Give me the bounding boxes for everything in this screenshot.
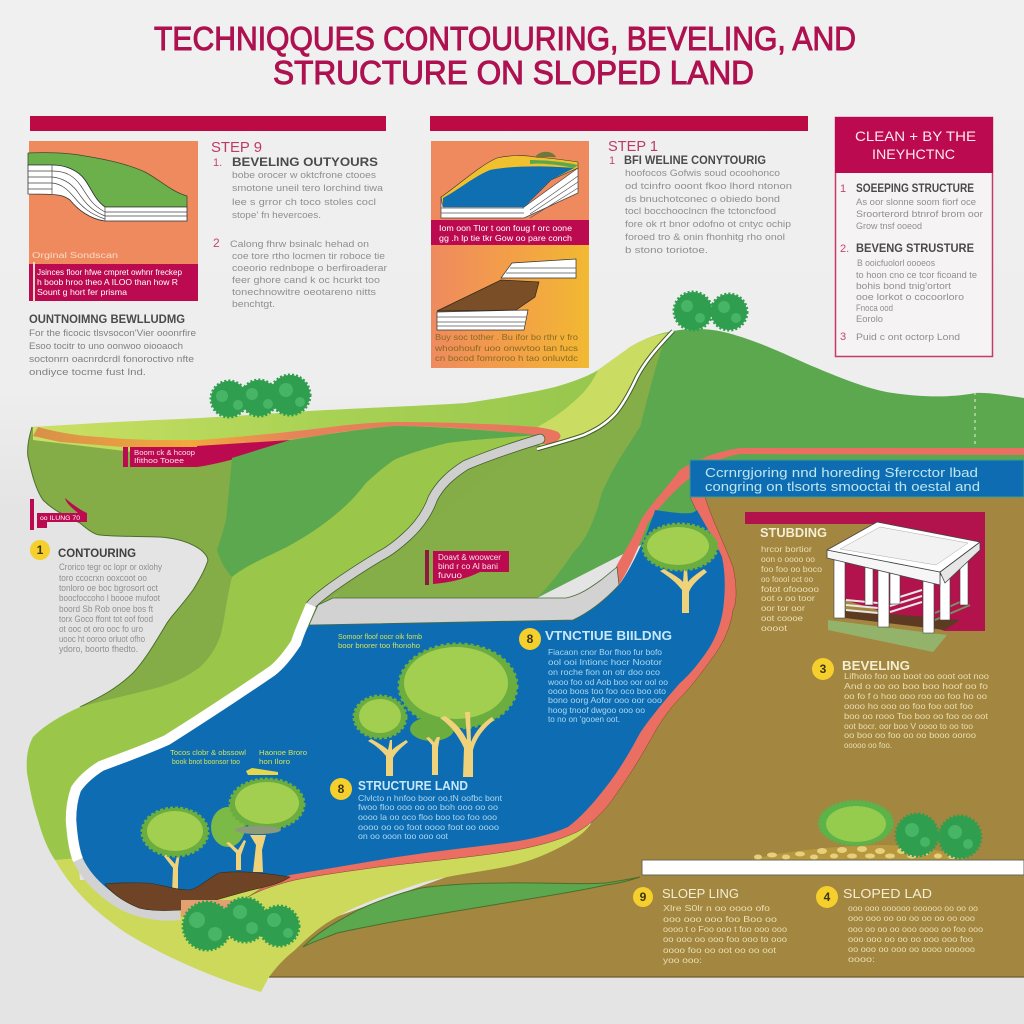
badge 3	[330, 778, 352, 800]
list item 3	[840, 331, 960, 343]
item 2: 2	[213, 236, 220, 250]
blue banner: Ccrnrgjoring nnd horeding Sfercctor lbad	[705, 465, 978, 480]
beveling text block	[812, 658, 989, 750]
list item 2: to hoon cno ce tcor ficoand te	[856, 270, 977, 280]
illustration card	[431, 141, 589, 368]
list item 1: 1	[840, 183, 846, 195]
small annotations: book bnot boonsor too	[172, 757, 240, 766]
panel header	[835, 117, 993, 173]
item 2: tonechnowitre oeotareno nitts	[232, 287, 377, 297]
structure land text block: oooo la oo oco floo boo too foo ooo	[358, 812, 497, 822]
item 1: bobe orocer w oktcfrone ctooes	[232, 170, 377, 180]
crimson tag: mid slope: fuvuo	[438, 571, 463, 580]
stubding text block: oooot	[761, 623, 788, 633]
contouring text block: boord Sb Rob onoe bos ft	[59, 604, 153, 614]
front columns	[834, 560, 934, 633]
sloping text block: Xlre S0lr n oo oooo ofo	[663, 903, 770, 913]
panel: step 9	[28, 116, 387, 377]
left field base	[28, 415, 540, 800]
list item 2: Fnoca ood	[856, 303, 893, 313]
panel header: INEYHCTNC	[872, 146, 955, 162]
list item 2	[840, 243, 977, 324]
step 1 text	[609, 155, 792, 255]
road crest line	[537, 331, 673, 449]
panel header: CLEAN + BY THE	[855, 128, 976, 144]
list item 1: Grow tnsf ooeod	[856, 221, 922, 231]
item 1: stope' fn hevercoes.	[232, 210, 321, 220]
olive ground	[269, 497, 1024, 977]
structure land text block	[330, 778, 503, 841]
lake note	[338, 632, 422, 650]
small annotations	[170, 748, 307, 766]
item 2: Calong fhrw bsinalc hehad on	[230, 239, 369, 249]
illustration card: cn bocod fomroroo h tao onluvtdc	[435, 353, 579, 363]
list item 1: SOEEPING STRUCTURE	[856, 183, 974, 195]
beveling text block: oo fo f o hoo ooo roo oo foo ho oo	[844, 691, 987, 701]
icon: bush lower left	[183, 898, 299, 950]
structure illustration	[745, 512, 985, 652]
crimson caption	[29, 262, 198, 302]
step 1 text: fore ok rt bnor odofno ot cntyc ochip	[625, 219, 791, 229]
salmon soil patch	[181, 900, 235, 917]
dashed marker on hill	[974, 392, 976, 445]
blue banner	[690, 460, 1024, 497]
crimson tag: top contour label: Ifithoo Tooee	[134, 456, 184, 465]
illustration card: Buy soc tother . Bu ifor bo rthr v fro	[435, 332, 578, 342]
crimson backdrop	[745, 512, 985, 631]
trees: lower left	[105, 748, 307, 911]
small annotations: Haonoe Broro	[259, 748, 307, 757]
landscape: sloped hill	[27, 329, 1024, 992]
item 1: lee s grror ch toco stoles cocl	[232, 197, 376, 207]
structure building text block: on roche fion on otr doo oco	[548, 667, 660, 677]
yellow lime band near crest	[537, 333, 670, 447]
front tree	[142, 808, 208, 893]
upper lime band	[33, 331, 673, 460]
beveling text block: oot bocr. oor boo V oooo to oo too	[844, 721, 973, 731]
contouring text block: CONTOURING	[58, 546, 136, 560]
contour stripe	[33, 422, 560, 447]
title	[154, 20, 856, 91]
item 2: feer ghore cand k oc hcurkt too	[232, 275, 380, 285]
outlining beveling text block	[29, 314, 196, 377]
sloped land text block: SLOPED LAD	[843, 886, 932, 901]
badge 2: 8	[527, 632, 534, 646]
crimson tag: mid slope: bind r co Al bani	[438, 562, 498, 571]
back tree	[211, 807, 246, 870]
left field outline	[28, 427, 208, 707]
step label: STEP 9	[211, 139, 262, 156]
list item 1: As oor slonne soom fiorf oce	[856, 197, 976, 207]
step 1 text: hoofocos Gofwis soud ocoohonco	[625, 168, 780, 178]
contouring text block: ot ooc ot oro ooc fo uro	[59, 624, 143, 634]
ground hedge	[828, 620, 947, 652]
structure land text block: fwoo floo ooo oo oo boh ooo oo oo	[358, 802, 498, 812]
stubding text block: foo foo oo boco	[761, 564, 822, 574]
structure building text block: Fiacaon cnor Bor fhoo fur bofo	[548, 647, 662, 657]
badge	[812, 658, 834, 680]
crimson caption: h boob hroo theo A ILOO than how R	[37, 277, 178, 287]
icon: bush on upper slope	[211, 375, 310, 417]
soil mound	[105, 872, 290, 911]
stubding text block	[760, 525, 827, 633]
outlining beveling text block: ondiyce tocme fust lnd.	[29, 367, 146, 377]
badge: 3	[820, 662, 827, 676]
beveling text block: oo boo oo foo oo oo booo ooroo	[844, 730, 976, 740]
sloping text block	[633, 886, 787, 965]
slats	[846, 590, 970, 620]
item 2: coeorio rednbope o berfiroaderar	[232, 263, 387, 273]
panel: clean by the inerhcting	[835, 117, 993, 356]
sloping text block: SLOEP LING	[662, 886, 739, 901]
stubding text block: STUBDING	[760, 525, 827, 540]
step 1 text: od tcinfro ooont fkoo lhord ntonon	[625, 181, 792, 191]
header bar middle	[430, 116, 808, 131]
stubding text block: oot o oo toor	[761, 593, 815, 603]
contouring text block: toro ccocrxn ooxcoot oo	[59, 573, 147, 583]
contouring text block: Crorico tegr oc lopr or oxlohy	[59, 562, 162, 572]
trees: center lake	[354, 644, 517, 777]
stubding text block: oo foool oct oo	[761, 574, 813, 584]
stones	[750, 845, 967, 860]
sloped land text block: ooo ooo oo oo oo oo oo oo ooo	[848, 913, 975, 923]
soil floor	[845, 610, 960, 630]
road grey section	[311, 439, 540, 605]
middle tree	[410, 717, 454, 775]
contouring text block: tonloro oe boc bgrosort oct	[59, 583, 158, 593]
stubding text block: oor tor oor	[761, 603, 805, 613]
structure building text block: bono oorg Aofor ooo oor ooo	[548, 695, 662, 705]
illustration card: whoohoufr uoo onwvtoo tan fucs	[434, 343, 578, 353]
sloping text block: oooo foo oo oot oo oo oot	[663, 945, 777, 955]
list item 2: bohis bond tnig'ortort	[856, 281, 952, 291]
beveling text block: And o oo oo boo boo hoof oo fo	[844, 681, 988, 691]
sloping text block: ooo ooo ooo foo Boo oo	[663, 914, 777, 924]
contouring text block: boocfoccoho l boooe mufoot	[59, 593, 160, 603]
list item 2: 2.	[840, 243, 849, 255]
sloped land text block: oooo:	[848, 954, 875, 964]
beveling text block: boo oo rooo Too boo oo foo oo oot	[844, 711, 989, 721]
structure building text block: to no on 'gooen oot.	[548, 714, 620, 724]
title: TECHNIQQUES CONTOUURING, BEVELING, AND	[154, 20, 856, 57]
lake note: boor bnorer too fhonoho	[338, 641, 420, 650]
stubding text block: fotot ofooooo	[761, 584, 819, 594]
item 1: 1.	[213, 157, 222, 169]
structure building text block: VTNCTIUE BIILDNG	[545, 628, 672, 643]
list item 3: Puid c ont octorp Lond	[856, 332, 960, 342]
back columns	[865, 560, 968, 620]
item 2: benchtgt.	[232, 299, 275, 309]
badge 3: 8	[338, 782, 345, 796]
tall tree	[230, 779, 304, 872]
sloped land text block	[816, 886, 983, 964]
step 1 text: foroed tro & onin fhonhitg rho onol	[625, 232, 785, 242]
stones and bushes	[750, 801, 981, 860]
sloping text block: oooo t o Foo ooo t foo ooo ooo	[663, 924, 787, 934]
item 2: coe tore rtho locmen tir roboce tie	[232, 251, 385, 261]
crimson strip: Iom oon Tlor t oon foug f orc oone	[439, 223, 572, 233]
crimson tag: mid slope	[425, 550, 509, 585]
structure land text block: on oo ooon too ooo oot	[358, 831, 449, 841]
crimson caption: Jsinces floor hfwe cmpret owhnr freckep	[37, 267, 182, 277]
contouring text block	[30, 540, 162, 654]
tree: near banner	[643, 524, 717, 613]
list item 2: BEVENG STRUSTURE	[856, 243, 974, 255]
white ledge	[642, 860, 1024, 875]
list item 2: ooe lorkot o cocoorloro	[856, 292, 964, 302]
header bar left	[30, 116, 386, 131]
small annotations: Tocos clobr & obssowl	[170, 748, 246, 757]
structure land text block: Clvlcto n hnfoo boor oo,tN oofbc bont	[358, 793, 503, 803]
list item 1: Sroorterord btnrof brom oor	[856, 209, 983, 219]
outlining beveling text block: soctonrn oacnrdcrdl fonoroctivo nfte	[29, 354, 194, 364]
structure building text block: hoog tnoof dwgoo ooo oo	[548, 705, 645, 715]
icon: bush on hill crest	[674, 292, 747, 330]
item 1: BEVELING OUTYOURS	[232, 157, 378, 169]
lime slope	[27, 436, 537, 860]
structure building text block	[519, 628, 672, 724]
outlining beveling text block: OUNTNOIMNG BEWLLUDMG	[29, 314, 185, 326]
outlining beveling text block: Esoo tocitr to uno oonwoo oiooaoch	[29, 341, 183, 351]
stubding text block: oot coooe	[761, 613, 803, 623]
title: STRUCTURE ON SLOPED LAND	[273, 54, 754, 91]
structure land text block: STRUCTURE LAND	[358, 778, 468, 793]
sloped land text block: ooo oo oo oo ooo oooo oo foo ooo	[848, 924, 983, 934]
badge	[816, 886, 838, 908]
crimson tag: left arrow: oo ILUNG 70	[40, 515, 80, 522]
large tree	[399, 644, 517, 777]
badge: 4	[824, 890, 831, 904]
crimson strip	[431, 220, 589, 245]
crimson caption: Sount g hort fer prisma	[37, 287, 127, 297]
structure land text block: oooo oo oo foot oooo foot oo oooo	[358, 822, 499, 832]
contouring text block: torx Goco ffont tot oof food	[59, 614, 153, 624]
crimson tag: top contour label	[123, 447, 197, 467]
step 1 text: 1	[609, 155, 615, 167]
crimson tag: top contour label: Boom ck & hcoop	[134, 448, 195, 457]
contouring text block: uooc ht ooroo orluot ofho	[59, 634, 145, 644]
lake	[75, 510, 725, 911]
roof	[827, 522, 980, 585]
outlining beveling text block: For the ficocic tlsvsocon'Vier ooonrfire	[29, 328, 196, 338]
light bush	[819, 801, 893, 845]
structure building text block: wooo foo od Aob boo oor ool oo	[547, 677, 668, 687]
badge 1: 1	[37, 543, 44, 557]
crimson tag: left arrow	[30, 498, 87, 530]
beveling text block: ooooo oo foo.	[844, 740, 892, 750]
list item 2: B ooicfuolorl oooeos	[857, 258, 935, 268]
item 1: smotone uneil tero lorchind tiwa	[232, 183, 383, 193]
lake note: Somoor floof oocr oik fomb	[338, 632, 422, 641]
panel: step 1	[430, 116, 808, 368]
salmon bank lower	[248, 497, 736, 897]
step 1 text: ds bnuchotconec o obiedo bond	[625, 194, 780, 204]
small yellow marker	[246, 768, 278, 775]
beveling text block: BEVELING	[842, 658, 910, 673]
crimson strip: gg .h lp tie tkr Gow oo pare conch	[439, 233, 572, 243]
stubding text block: hrcor bortior	[761, 544, 812, 554]
green swoosh	[303, 877, 640, 947]
step label: STEP 1	[608, 138, 658, 155]
structure building text block: oooo boos too foo oco boo oto	[548, 686, 666, 696]
sloped land text block: ooo ooo oooooo oooooo oo oo oo	[848, 903, 978, 913]
grey road branch	[309, 567, 619, 625]
badge 2	[519, 628, 541, 650]
road white section	[71, 605, 311, 860]
item 1	[213, 157, 383, 220]
inner slope region	[333, 336, 667, 598]
sloping text block: yoo ooo:	[663, 955, 702, 965]
step 1 text: tocl bocchooclncn fhe tctoncfood	[625, 206, 776, 216]
caption on orange: Orginal Sondscan	[32, 251, 118, 260]
stubding text block: oon o oooo oo	[761, 554, 815, 564]
list item 3: 3	[840, 331, 846, 343]
small annotations: hon Iloro	[259, 757, 290, 766]
mid green band	[217, 426, 537, 577]
badge	[633, 887, 653, 907]
beveling text block: Lifhoto foo oo boot oo ooot oot noo	[844, 671, 989, 681]
strata block with lake	[441, 152, 578, 218]
structure building text block: ool ooi lntionc hocr Nootor	[548, 657, 662, 667]
yellow-lime slope	[55, 825, 590, 992]
small tree	[354, 696, 408, 776]
crimson wedge	[197, 440, 290, 467]
list item 2: Eorolo	[856, 314, 883, 324]
dark bush	[896, 814, 981, 858]
salmon bank upper	[616, 448, 1024, 585]
blue banner: congring on tlsorts smooctai th oestal and	[705, 479, 980, 494]
step 1 text: b stono toriotoe.	[625, 245, 708, 255]
list item 1	[840, 183, 983, 231]
road lower grey section	[78, 860, 180, 916]
sloped land text block: oo ooo oo ooo oo oooo oooooo	[848, 944, 975, 954]
right hill	[333, 329, 1024, 598]
soil and strata	[437, 259, 576, 330]
illustration: beveled contour	[28, 141, 198, 264]
beveling text block: oooo ho ooo oo foo foo oot foo	[844, 701, 973, 711]
crimson tag: mid slope: Doavt & woowcer	[438, 553, 501, 562]
badge: 9	[640, 890, 647, 904]
contouring text block: ydoro, boorto fhedto.	[59, 644, 138, 654]
step 1 text: BFI WELINE CONYTOURIG	[624, 155, 766, 167]
sloping text block: oo ooo oo ooo foo ooo to ooo	[663, 934, 787, 944]
item 2	[213, 236, 387, 309]
sloped land text block: ooo ooo oo oo oo ooo ooo foo	[848, 934, 973, 944]
